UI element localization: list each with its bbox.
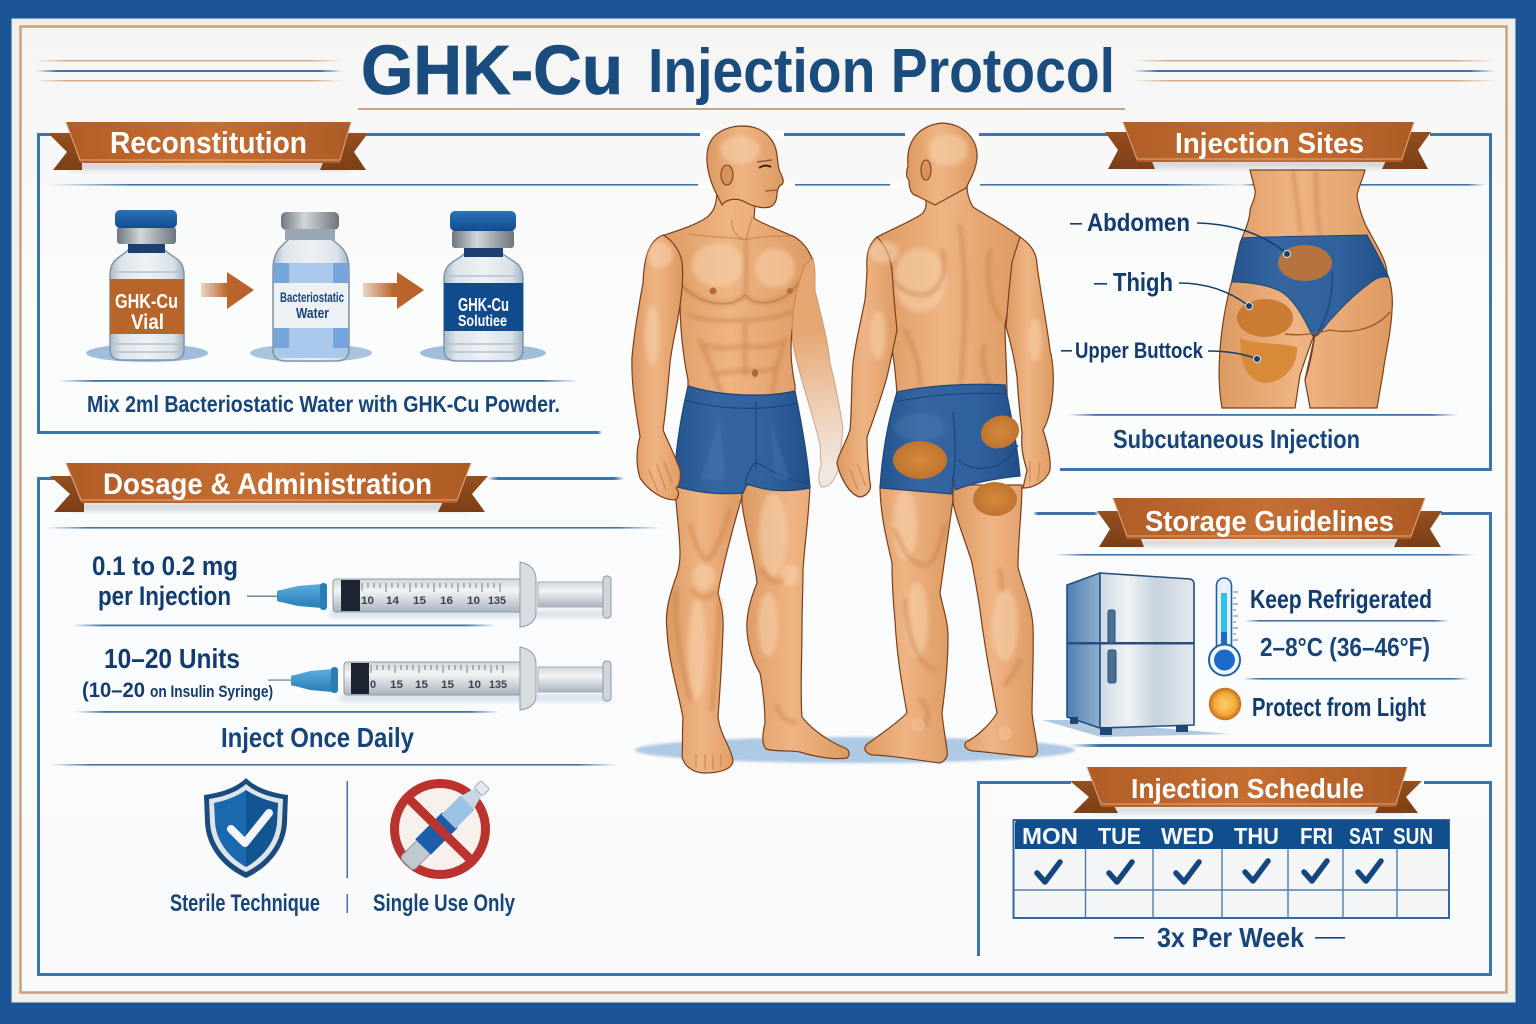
syringe: dose one: 10 xyxy=(467,595,480,607)
front legs xyxy=(666,485,849,773)
calendar table: SUN xyxy=(1393,823,1433,849)
syringe: dose one: 14 xyxy=(386,595,400,607)
heading ribbon: injection sites: Injection Sites xyxy=(1175,128,1364,160)
divider xyxy=(50,764,618,766)
front torso xyxy=(662,188,813,395)
text: dose in mg: per Injection xyxy=(98,581,231,611)
text: temperature range: 2–8°C (36–46°F) xyxy=(1260,632,1430,662)
syringe: dose two: 10 xyxy=(468,679,481,691)
text: sterile technique: Sterile Technique xyxy=(170,890,320,917)
syringe: dose one xyxy=(247,562,611,627)
vial: GHK-Cu solution xyxy=(420,211,546,362)
syringe: dose two: 15 xyxy=(390,679,403,691)
back shorts xyxy=(880,384,1024,516)
front right arm faded xyxy=(792,258,843,487)
heading ribbon: dosage: Dosage & Administration xyxy=(103,468,432,501)
vial: bacteriostatic water xyxy=(250,212,372,362)
heading ribbon: reconstitution xyxy=(48,122,368,170)
figure: back view xyxy=(837,123,1053,763)
text: dose in units: (10–20 xyxy=(82,679,145,702)
text: keep refrigerated: Keep Refrigerated xyxy=(1250,584,1432,614)
heading ribbon: storage xyxy=(1097,498,1442,547)
panel: injection sites xyxy=(1060,122,1492,471)
text: mixing instruction: Mix 2ml Bacteriostatic Water with GHK-Cu Powder. xyxy=(87,391,560,417)
ground shadow xyxy=(635,737,1075,763)
syringe: dose one: 135 xyxy=(488,595,506,607)
syringe: dose two: 15 xyxy=(441,679,454,691)
text: dose in mg: 0.1 to 0.2 mg xyxy=(92,551,238,581)
label: thigh xyxy=(1094,267,1173,297)
back torso xyxy=(877,185,1020,395)
icon: light xyxy=(1210,688,1240,720)
syringe: dose one: 15 xyxy=(413,595,426,607)
back head xyxy=(907,123,977,205)
heading ribbon: injection sites xyxy=(1105,122,1431,169)
icon: sterile shield xyxy=(204,778,288,878)
text: dose in mg xyxy=(92,551,238,611)
syringe: dose one: 10 xyxy=(361,595,374,607)
arrow: water to solution xyxy=(363,272,424,309)
calendar table: TUE xyxy=(1098,823,1141,849)
arrow: vial to water xyxy=(201,272,254,309)
syringe: dose two xyxy=(268,647,611,710)
label: thigh: Thigh xyxy=(1113,267,1173,297)
text: dose in units xyxy=(82,643,273,702)
icon: no reuse sign xyxy=(394,777,493,874)
text: weekly frequency: 3x Per Week xyxy=(1157,922,1304,953)
vial: bacteriostatic water: Water xyxy=(296,305,329,322)
heading ribbon: dosage xyxy=(50,463,488,512)
front left arm xyxy=(632,235,683,500)
panel: storage guidelines xyxy=(1033,498,1492,747)
calendar table: WED xyxy=(1161,823,1214,849)
panel: dosage and administration xyxy=(37,463,1492,976)
frame: bottom edge xyxy=(37,973,1492,976)
heading ribbon: schedule: Injection Schedule xyxy=(1131,773,1364,804)
icon: thermometer xyxy=(1209,578,1240,676)
label: abdomen: Abdomen xyxy=(1087,209,1190,237)
syringe: dose two: 15 xyxy=(415,679,428,691)
vial: GHK-Cu vial: GHK-Cu xyxy=(115,291,178,313)
vial: GHK-Cu solution: GHK-Cu xyxy=(458,295,509,315)
front head xyxy=(707,126,783,208)
syringe: dose one: 16 xyxy=(440,595,453,607)
separator xyxy=(346,781,348,913)
back arms xyxy=(837,237,1053,497)
text: dose in units: 10–20 Units xyxy=(104,643,240,674)
panel: reconstitution xyxy=(37,122,1248,434)
illustration: hips with injection zones xyxy=(1179,170,1392,408)
text: subcutaneous: Subcutaneous Injection xyxy=(1113,424,1360,454)
calendar table: SAT xyxy=(1349,823,1383,849)
figure: front view xyxy=(632,126,849,773)
syringe: dose two: 0 xyxy=(370,679,376,691)
heading ribbon: reconstitution: Reconstitution xyxy=(110,125,307,160)
divider xyxy=(1245,620,1449,622)
text: single use only: Single Use Only xyxy=(373,890,516,917)
divider xyxy=(75,711,499,713)
vial: GHK-Cu solution: Solutiee xyxy=(458,313,507,330)
calendar table: FRI xyxy=(1300,823,1333,849)
vial: bacteriostatic water: Bacteriostatic xyxy=(280,289,344,305)
vial: GHK-Cu vial: Vial xyxy=(131,311,164,334)
title xyxy=(36,31,1495,110)
text: protect from light: Protect from Light xyxy=(1252,692,1426,722)
heading ribbon: storage: Storage Guidelines xyxy=(1145,506,1394,538)
text: dose in units: on Insulin Syringe) xyxy=(150,682,273,701)
heading ribbon: schedule xyxy=(1070,767,1422,813)
calendar table: MON xyxy=(1022,823,1078,849)
text: frequency: Inject Once Daily xyxy=(221,722,414,753)
panel: injection schedule xyxy=(977,767,1492,976)
title: Injection Protocol xyxy=(648,37,1115,106)
divider xyxy=(72,624,496,626)
label: upper buttock: Upper Buttock xyxy=(1075,338,1204,363)
syringe: dose two: 135 xyxy=(489,679,507,691)
line gaps around the figures xyxy=(698,131,980,188)
divider xyxy=(1243,678,1469,680)
icon: refrigerator xyxy=(1042,573,1229,737)
back legs xyxy=(865,485,1038,763)
vial: GHK-Cu vial xyxy=(86,210,208,362)
calendar table: THU xyxy=(1234,823,1279,849)
front shorts xyxy=(674,386,810,494)
calendar table xyxy=(1014,820,1449,918)
title: GHK-Cu xyxy=(361,31,623,109)
